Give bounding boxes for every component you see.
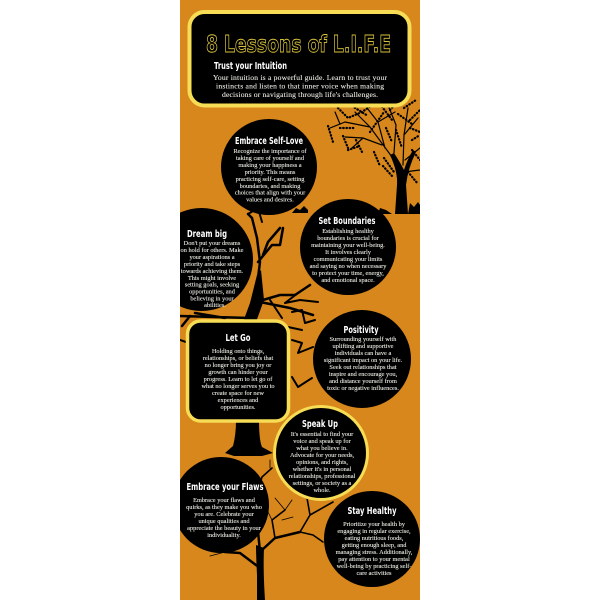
panel: Dream big: priority and take steps xyxy=(184,261,241,268)
panel: Embrace your Flaws xyxy=(173,457,269,553)
panel: Let Go: no longer bring you joy or xyxy=(205,362,272,369)
panel: Embrace Self-Love: Embrace Self-Love xyxy=(235,136,303,147)
panel: Embrace Self-Love: choices that align with your xyxy=(235,190,306,196)
panel: Dream big: setting goals, seeking xyxy=(185,282,240,288)
panel: Dream big: on hold for others. Make xyxy=(181,247,244,254)
panel: Dream big: abilities. xyxy=(204,302,226,309)
panel: Stay Healthy: Stay Healthy xyxy=(348,506,397,517)
panel: Positivity xyxy=(313,310,411,408)
panel: Speak Up xyxy=(274,406,368,500)
panel: Set Boundaries: communicating your limits xyxy=(314,256,383,263)
panel: Set Boundaries xyxy=(300,199,396,295)
panel: Embrace your Flaws: Embrace your Flaws xyxy=(186,482,264,493)
panel: Set Boundaries: and emotional space. xyxy=(321,277,375,284)
panel: Stay Healthy: pay attention to your mental xyxy=(338,556,410,563)
panel: Speak Up: what you believe in. xyxy=(296,445,348,452)
panel: Positivity: Surrounding yourself with xyxy=(330,336,397,343)
panel: Set Boundaries: to protect your time, energy, xyxy=(312,270,384,277)
panel: Dream big: believing in your xyxy=(190,296,235,302)
tree: bottom xyxy=(210,460,333,600)
panel: Dream big: Don't put your dreams xyxy=(184,240,241,247)
panel: Dream big: This might involve xyxy=(188,275,236,282)
panel: Speak Up: settings, or society as a xyxy=(293,480,352,487)
panel: Stay Healthy: eating nutritious foods, xyxy=(345,535,404,542)
text: intuition: Your intuition is a powerful guide. Learn to trust your xyxy=(213,73,387,82)
panel: Speak Up: Advocate for your needs, xyxy=(290,452,354,459)
panel: Positivity: significant impact on your life. xyxy=(324,357,403,364)
panel: Dream big: Dream big xyxy=(187,229,227,240)
panel: Embrace Self-Love: practicing self-care, setting xyxy=(236,176,305,183)
panel: Set Boundaries: It involves clearly xyxy=(325,249,372,256)
panel: Let Go: opportunities. xyxy=(220,404,256,411)
panel: Let Go: what no longer serves you to xyxy=(201,383,275,390)
panel: Set Boundaries: Set Boundaries xyxy=(318,216,376,227)
panel: Embrace Self-Love: values and desires. xyxy=(246,196,294,204)
panel: Embrace your Flaws: appreciate the beauty in your xyxy=(187,525,262,532)
panel: Set Boundaries: Establishing healthy xyxy=(322,228,375,235)
panel: Dream big: opportunities, and xyxy=(189,288,236,296)
panel: Embrace your Flaws: unique qualities and xyxy=(198,518,250,525)
panel: Stay Healthy: getting enough sleep, and xyxy=(342,542,407,549)
panel: Dream big xyxy=(180,208,253,311)
panel: Dream big: your aspirations a xyxy=(189,254,235,261)
panel: Dream big: towards achieving them. xyxy=(181,268,244,275)
panel: Embrace your Flaws: you are. Celebrate your xyxy=(194,511,255,518)
panel: Embrace your Flaws: quirks, as they make you who xyxy=(186,504,262,511)
panel: Stay Healthy xyxy=(324,491,420,587)
panel: Let Go xyxy=(188,321,288,421)
text: intuition: instincts and listen to that inner voice when making xyxy=(216,82,384,90)
heading: 8 Lessons of L.I.F.E: 8 Lessons of L.I.F.E xyxy=(206,32,391,58)
panel: Let Go: Let Go xyxy=(226,333,251,344)
panel: Speak Up: relationships, professional xyxy=(289,473,356,480)
heading: Trust your Intuition: Trust your Intuition xyxy=(214,61,287,72)
orange background panel xyxy=(180,0,420,600)
panel: Set Boundaries: maintaining your well-being. xyxy=(311,242,385,249)
panel: Positivity: individuals can have a xyxy=(335,350,391,357)
panel: Let Go: growth can hinder your xyxy=(208,369,269,376)
panel: Embrace Self-Love: taking care of yourself and xyxy=(236,155,305,162)
panel: Stay Healthy: well-being by practicing self- xyxy=(337,563,411,570)
panel: Embrace your Flaws: individuality. xyxy=(207,532,241,539)
panel: Positivity: and distance yourself from xyxy=(329,378,397,385)
tree: top right xyxy=(292,100,420,214)
panel: Positivity: uplifting and supportive xyxy=(333,343,394,350)
panel: Speak Up: opinions, and rights, xyxy=(296,459,348,466)
panel: Stay Healthy: engaging in regular exercise, xyxy=(337,528,411,535)
panel: Embrace Self-Love: boundaries, and making xyxy=(240,183,301,190)
panel: Positivity: inspire and encourage you, xyxy=(329,371,398,378)
panel: Stay Healthy: managing stress. Additionally, xyxy=(336,549,413,556)
panel: Set Boundaries: boundaries is crucial for xyxy=(317,235,380,242)
panel: Let Go: progress. Learn to let go of xyxy=(204,376,273,383)
panel: Positivity: Seek out relationships that xyxy=(329,364,397,371)
panel: Speak Up: It's essential to find your xyxy=(291,431,354,438)
panel: Let Go: create space for new xyxy=(212,390,264,397)
panel: Let Go: experiences and xyxy=(218,397,259,404)
panel: Positivity: Positivity xyxy=(344,325,379,336)
panel: Let Go: Holding onto things, xyxy=(212,348,265,355)
panel: Embrace Self-Love: Recognize the importance of xyxy=(233,148,307,155)
text: intuition xyxy=(213,73,387,99)
panel: Positivity: toxic or negative influences. xyxy=(327,385,399,392)
panel: Stay Healthy: care activities xyxy=(356,570,392,577)
panel: Speak Up: whole. xyxy=(313,487,331,494)
panel: Stay Healthy: Prioritize your health by xyxy=(343,521,406,528)
panel: Embrace Self-Love: making your happiness a xyxy=(238,162,302,169)
panel: Embrace Self-Love: priority. This means xyxy=(245,169,296,176)
panel: Let Go: relationships, or beliefs that xyxy=(203,355,273,362)
text: intuition: decisions or navigating through life's challenges. xyxy=(222,90,378,99)
panel: Set Boundaries: and saying no when necessary xyxy=(310,263,387,270)
panel: Embrace Self-Love xyxy=(221,119,317,215)
panel: Speak Up: whether it's in personal xyxy=(293,466,352,473)
panel: Embrace your Flaws: Embrace your flaws and xyxy=(193,497,256,504)
tree: centre xyxy=(180,208,318,456)
panel: Speak Up: voice and speak up for xyxy=(293,438,352,445)
panel: Speak Up: Speak Up xyxy=(302,419,338,430)
panel: title box xyxy=(190,12,410,106)
